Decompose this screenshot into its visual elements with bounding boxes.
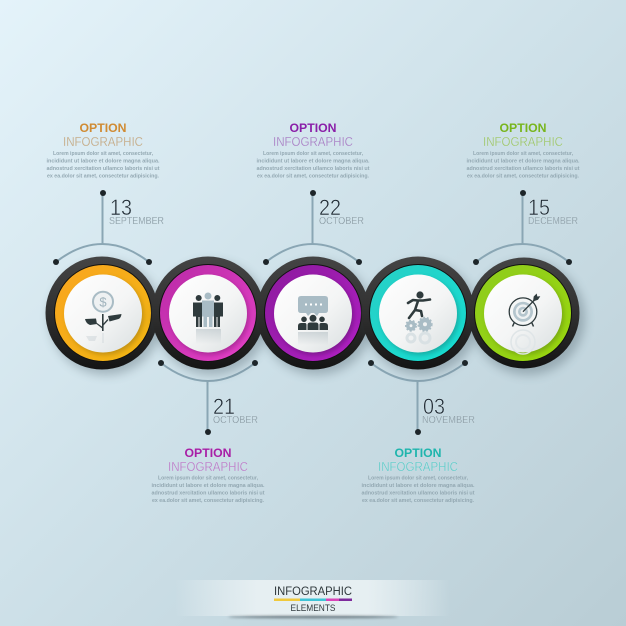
- text block: option 4: INFOGRAPHIC: [378, 460, 458, 474]
- text block: option 5: INFOGRAPHIC: [483, 135, 563, 149]
- icon: team of people: [193, 292, 223, 344]
- text block: option 4: incididunt ut labore et dolore magna aliqua.: [362, 483, 475, 489]
- date: 22 October: 22: [319, 195, 341, 220]
- text block: option 4: Lorem ipsum dolor sit amet, consectetur,: [368, 476, 468, 482]
- text block: option 1: [46, 123, 160, 180]
- date: 21 October: OCTOBER: [213, 415, 258, 426]
- text block: option 1: ex ea.dolor sit amet, consectetur adipisicing.: [47, 174, 159, 180]
- date: 22 October: [319, 195, 364, 227]
- banner colour bar: [274, 598, 352, 601]
- text block: option 2: adnostrud xercitation ullamco laboris nisi ut: [152, 490, 265, 496]
- footer banner: [175, 580, 450, 618]
- date: 21 October: [213, 394, 258, 426]
- text block: option 1: Lorem ipsum dolor sit amet, consectetur,: [53, 151, 153, 157]
- text block: option 5: Lorem ipsum dolor sit amet, consectetur,: [473, 151, 573, 157]
- text block: option 4: ex ea.dolor sit amet, consectetur adipisicing.: [362, 498, 474, 504]
- text block: option 3: ex ea.dolor sit amet, consectetur adipisicing.: [257, 174, 369, 180]
- timeline connector: arc 2: [158, 360, 258, 435]
- icon: target with arrow: [509, 294, 540, 354]
- text block: option 2: Lorem ipsum dolor sit amet, consectetur,: [158, 476, 258, 482]
- text block: option 2: OPTION: [184, 448, 232, 460]
- text block: option 3: INFOGRAPHIC: [273, 135, 353, 149]
- text block: option 5: incididunt ut labore et dolore magna aliqua.: [466, 158, 580, 164]
- text block: option 2: incididunt ut labore et dolore magna aliqua.: [152, 483, 265, 489]
- date: 21 October: 21: [213, 394, 235, 419]
- disc 4: teal with runner icon: [362, 256, 479, 375]
- date: 03 November: NOVEMBER: [422, 415, 475, 426]
- text block: option 2: [152, 448, 265, 504]
- timeline connector: arc 4: [368, 360, 468, 435]
- banner title: INFOGRAPHIC: [274, 586, 352, 598]
- text block: option 3: [256, 123, 370, 180]
- text block: option 3: Lorem ipsum dolor sit amet, consectetur,: [263, 151, 363, 157]
- disc 2: magenta with team icon: [152, 256, 269, 375]
- text block: option 4: adnostrud xercitation ullamco laboris nisi ut: [362, 490, 475, 496]
- date: 22 October: OCTOBER: [319, 216, 364, 227]
- icon: runner on gears: [406, 291, 432, 343]
- text block: option 4: [362, 448, 475, 504]
- text block: option 4: OPTION: [394, 448, 442, 460]
- disc 1: orange with plant icon: [46, 256, 163, 375]
- text block: option 3: incididunt ut labore et dolore magna aliqua.: [256, 158, 370, 164]
- disc 5: green with target icon: [468, 258, 585, 375]
- date: 15 December: DECEMBER: [528, 216, 578, 227]
- timeline connector: arc 1: [53, 190, 152, 265]
- banner subtitle: ELEMENTS: [290, 603, 336, 614]
- timeline connector: arc 5: [473, 190, 572, 265]
- icon: money plant: $: [99, 294, 107, 310]
- text block: option 5: [466, 123, 580, 180]
- timeline connector: arc 3: [263, 190, 362, 265]
- date: 15 December: [528, 195, 578, 227]
- disc 3: purple with discussion icon: [256, 256, 374, 375]
- text block: option 1: OPTION: [80, 123, 126, 135]
- text block: option 1: incididunt ut labore et dolore magna aliqua.: [46, 158, 160, 164]
- text block: option 1: INFOGRAPHIC: [63, 135, 143, 149]
- icon: group discussion: [298, 296, 328, 345]
- date: 13 September: 13: [110, 195, 132, 220]
- date: 13 September: SEPTEMBER: [109, 216, 164, 227]
- date: 13 September: [109, 195, 164, 227]
- text block: option 5: OPTION: [500, 123, 546, 135]
- date: 15 December: 15: [528, 195, 550, 220]
- text block: option 2: INFOGRAPHIC: [168, 460, 248, 474]
- text block: option 3: adnostrud xercitation ullamco laboris nisi ut: [256, 166, 370, 172]
- text block: option 5: adnostrud xercitation ullamco laboris nisi ut: [466, 166, 580, 172]
- text block: option 2: ex ea.dolor sit amet, consectetur adipisicing.: [152, 498, 264, 504]
- date: 03 November: [422, 394, 475, 426]
- text block: option 3: OPTION: [290, 123, 336, 135]
- text block: option 1: adnostrud xercitation ullamco laboris nisi ut: [46, 166, 160, 172]
- text block: option 5: ex ea.dolor sit amet, consectetur adipisicing.: [467, 174, 579, 180]
- date: 03 November: 03: [423, 394, 445, 419]
- banner shadow: [228, 616, 398, 618]
